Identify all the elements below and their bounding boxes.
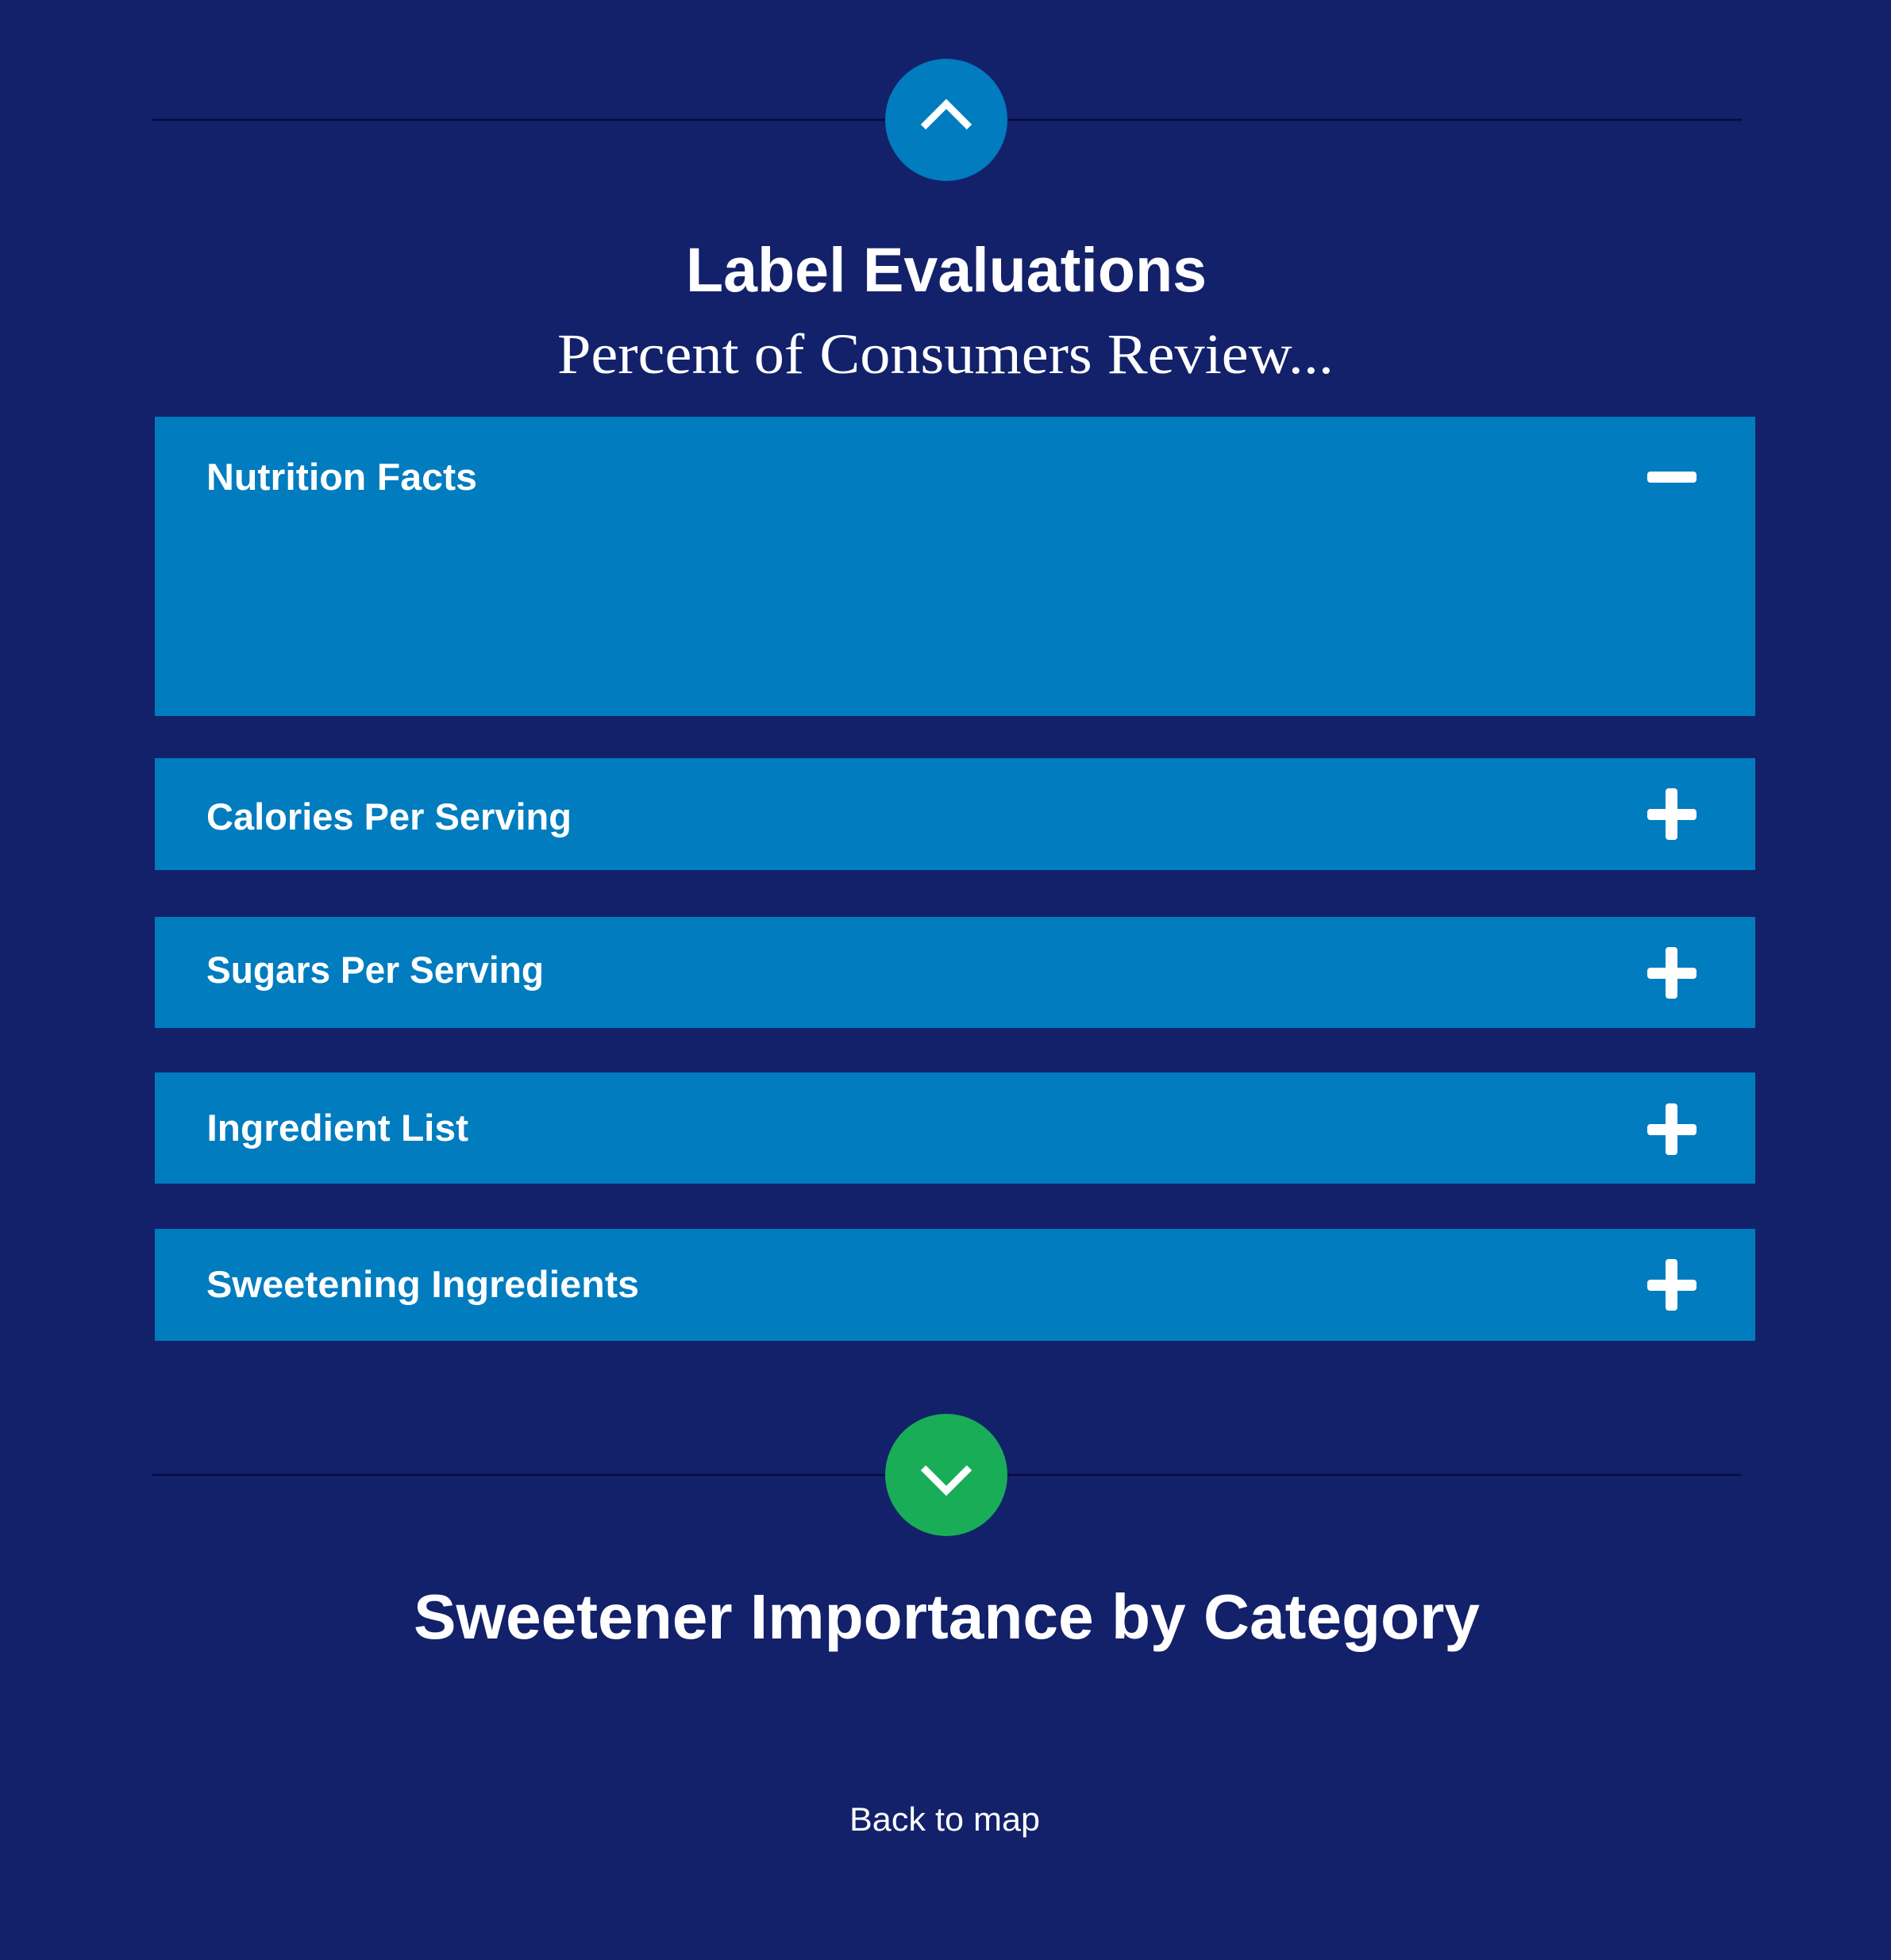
- icon: minus: [1647, 472, 1697, 483]
- heading: Sweetener Importance by Category: Sweetener Importance by Category: [414, 1581, 1481, 1652]
- panel: Calories Per Serving: [155, 758, 1755, 870]
- label: Ingredient List: Ingredient List: [206, 1107, 468, 1149]
- panel: Sweetening Ingredients: [155, 1229, 1755, 1341]
- label: Sugars Per Serving: Sugars Per Serving: [206, 949, 544, 991]
- heading: Label Evaluations: Label Evaluations: [686, 234, 1207, 305]
- label: Sweetening Ingredients: Sweetening Ingredients: [206, 1263, 639, 1305]
- icon: plus: [1647, 1259, 1697, 1311]
- label: Nutrition Facts: Nutrition Facts: [206, 456, 477, 498]
- icon: plus: [1647, 1103, 1697, 1155]
- subheading: Percent of Consumers Review: Percent of Consumers Review...: [557, 322, 1334, 386]
- label: Calories Per Serving: Calories Per Serving: [206, 795, 572, 838]
- panel: Sugars Per Serving: [155, 917, 1755, 1028]
- icon: plus: [1647, 947, 1697, 999]
- panel: Nutrition Facts: [155, 417, 1755, 716]
- top divider with up button: [152, 59, 1742, 181]
- bottom divider with down button: [152, 1414, 1741, 1536]
- link: Back to map: Back to map: [849, 1800, 1040, 1838]
- icon: plus: [1647, 788, 1697, 840]
- panel: Ingredient List: [155, 1072, 1755, 1184]
